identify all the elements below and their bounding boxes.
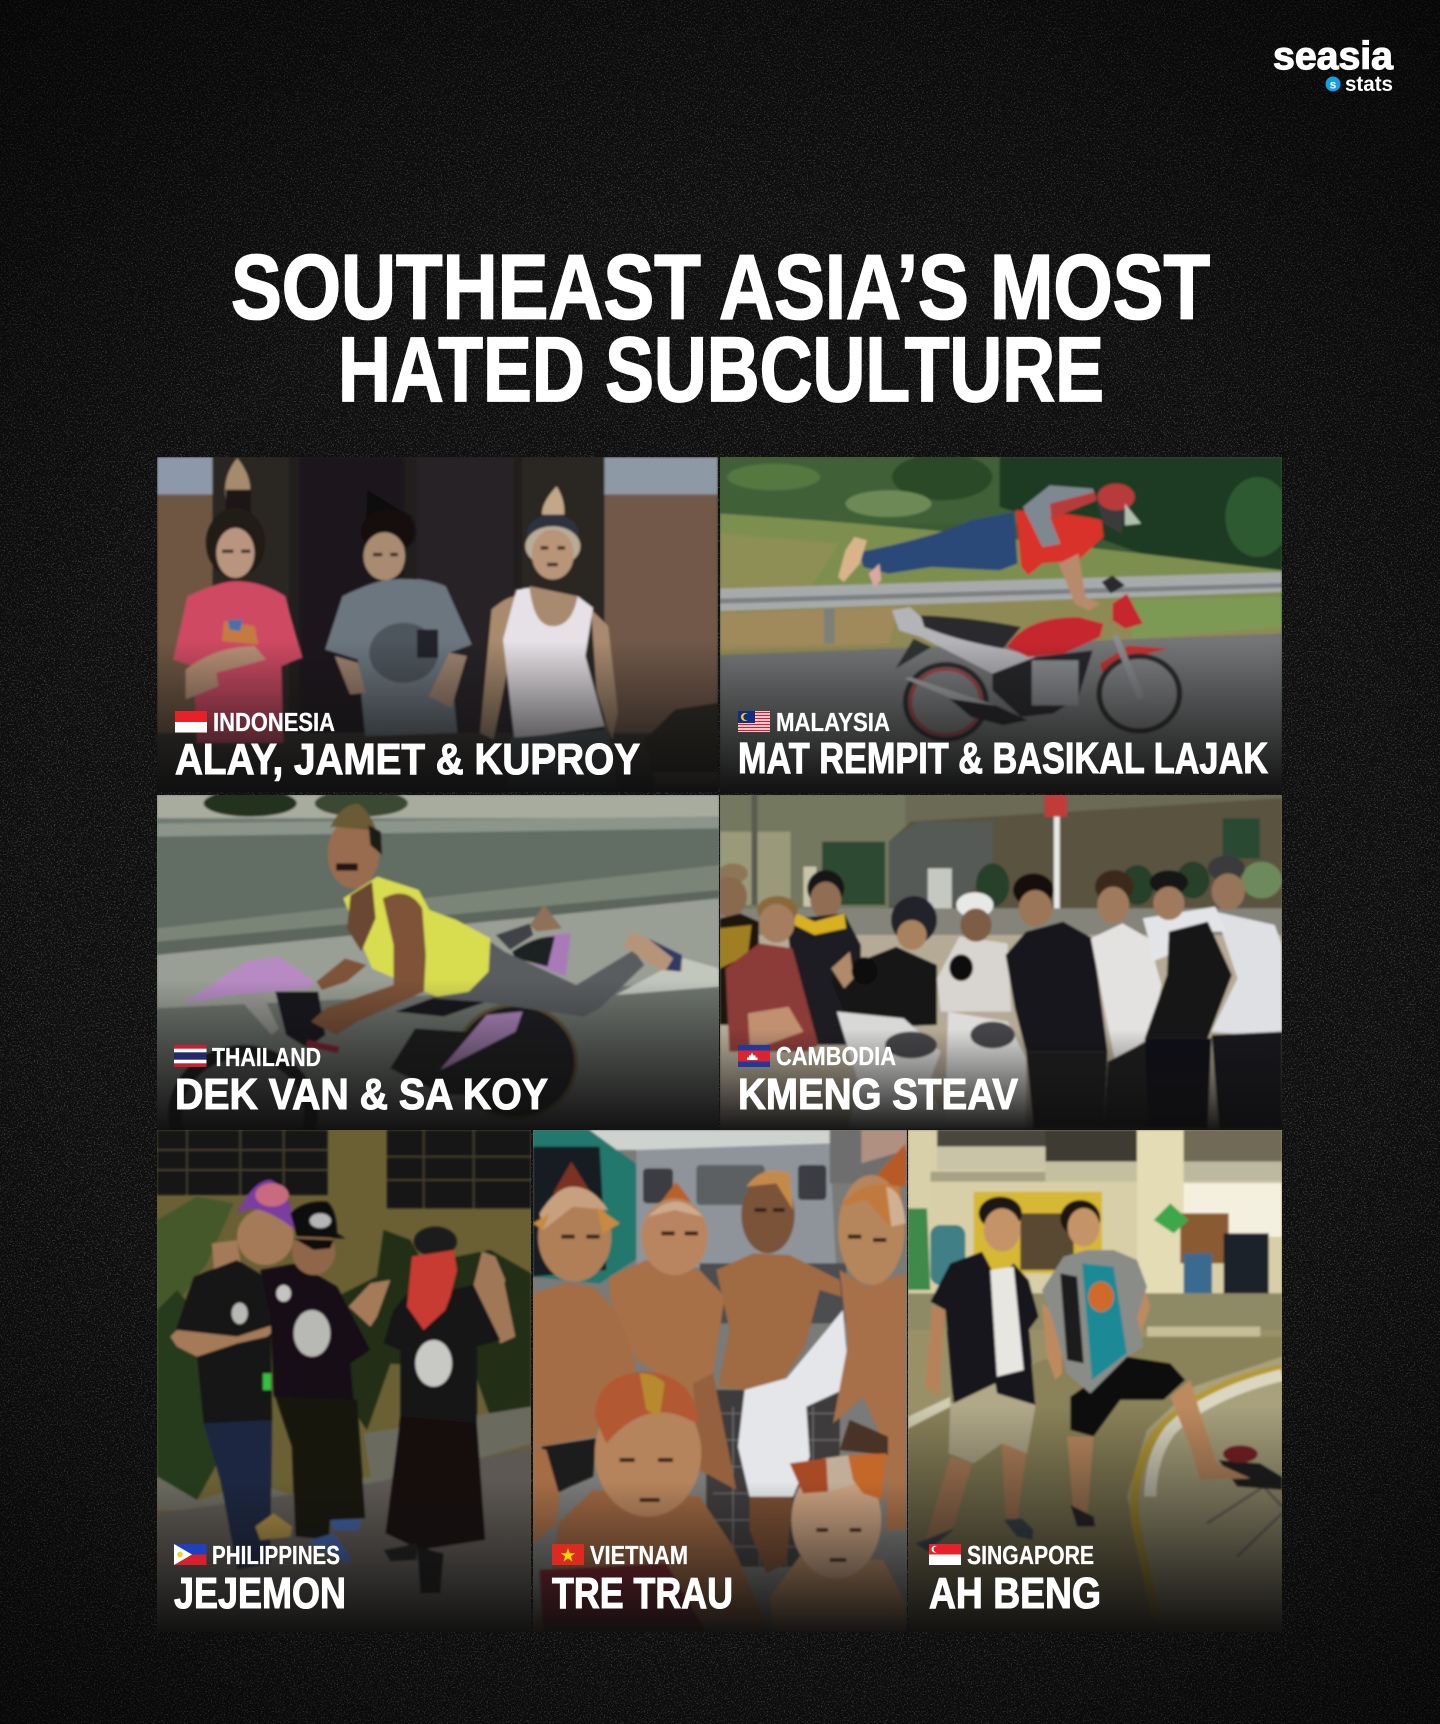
subculture name: KMENG STEAV xyxy=(738,1070,1019,1119)
country label: THAILAND xyxy=(212,1042,321,1072)
subculture name: AH BENG xyxy=(929,1569,1101,1618)
flag: Cambodia xyxy=(738,1045,770,1067)
subculture name: JEJEMON xyxy=(174,1569,346,1618)
flag: Indonesia xyxy=(175,711,207,732)
logo: seasia stats: s xyxy=(1330,78,1337,92)
logo: seasia stats: stats xyxy=(1345,73,1393,96)
flag: Philippines xyxy=(174,1544,206,1565)
photo: shirtless boys with dyed mohawks xyxy=(533,1130,907,1632)
subculture name: DEK VAN & SA KOY xyxy=(175,1070,548,1119)
subculture name: TRE TRAU xyxy=(552,1569,733,1618)
panel: Singapore xyxy=(908,1130,1282,1632)
country label: PHILIPPINES xyxy=(212,1540,340,1570)
flag: Singapore xyxy=(929,1544,961,1565)
logo: seasia stats xyxy=(1273,35,1393,96)
panel: Vietnam xyxy=(533,1130,907,1632)
photo: man in yellow vest lying on purple motorcycle xyxy=(157,795,719,1123)
country label: CAMBODIA xyxy=(776,1041,896,1071)
photo: three youths with spiked hair xyxy=(157,457,718,783)
country label: SINGAPORE xyxy=(967,1540,1094,1570)
title: SOUTHEAST ASIA’S MOST xyxy=(231,236,1210,338)
photo: group of young men with scooters xyxy=(720,795,1282,1130)
panel: Malaysia xyxy=(720,454,1290,793)
title: HATED SUBCULTURE xyxy=(338,319,1104,421)
country label: INDONESIA xyxy=(213,707,335,737)
photo: three youths in baggy black outfits xyxy=(157,1130,531,1624)
subculture name: MAT REMPIT & BASIKAL LAJAK xyxy=(738,734,1268,783)
panel: Indonesia xyxy=(157,457,718,792)
logo: seasia stats: seasia xyxy=(1273,35,1393,78)
photo: two young men posing in a void deck xyxy=(908,1130,1282,1626)
panel: Cambodia xyxy=(711,795,1282,1130)
photo: rider lying flat on red motorcycle xyxy=(720,457,1282,785)
flag: Malaysia xyxy=(738,711,770,732)
panel: Philippines xyxy=(157,1130,531,1632)
country label: MALAYSIA xyxy=(776,707,890,737)
title xyxy=(231,236,1210,421)
subculture name: ALAY, JAMET & KUPROY xyxy=(175,735,640,784)
flag: Thailand xyxy=(174,1045,206,1067)
flag: Vietnam xyxy=(552,1544,584,1565)
country label: VIETNAM xyxy=(590,1540,688,1570)
panel: Thailand xyxy=(157,790,719,1178)
